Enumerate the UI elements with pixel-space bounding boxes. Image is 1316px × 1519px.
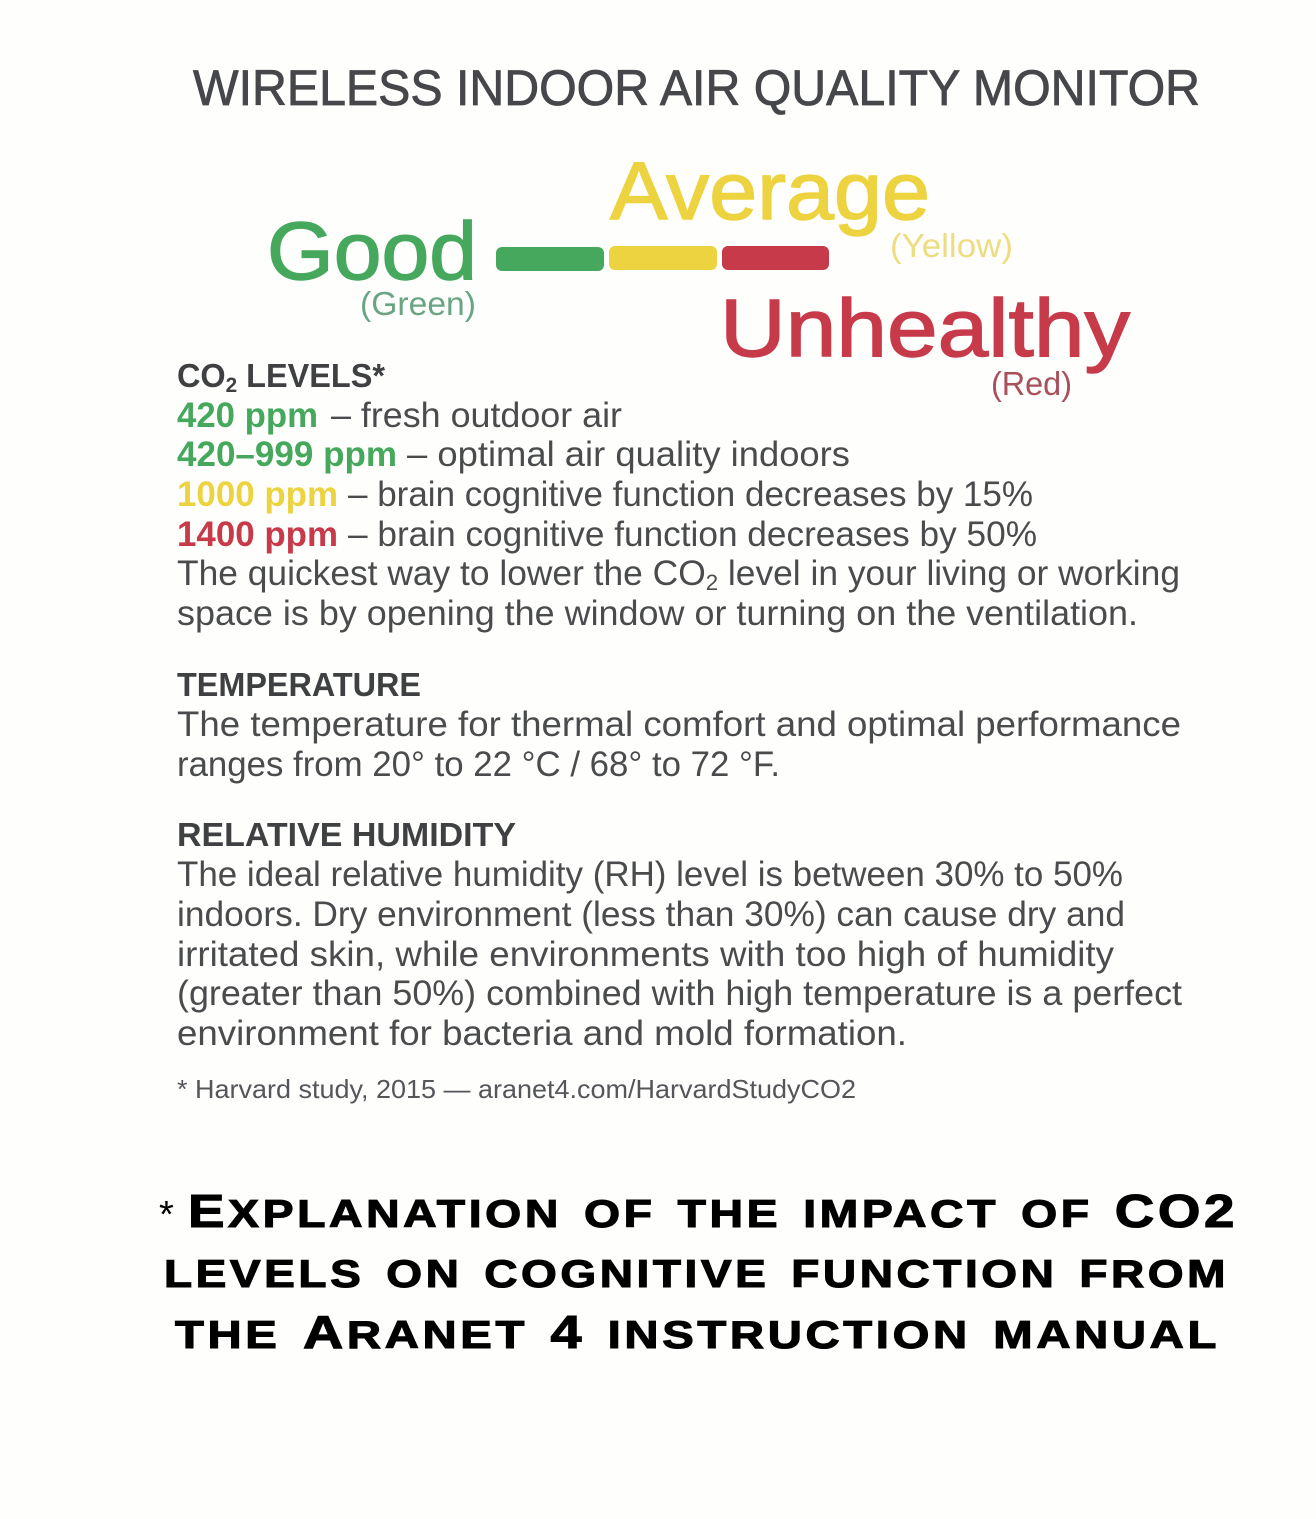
line: 420 ppm: – fresh outdoor air [331,396,622,435]
air quality scale [267,146,1130,402]
caption line 1: * [159,1194,174,1236]
line: 1400 ppm: – brain cognitive function decreases by 50% [348,515,1037,554]
line: 420-999 ppm [177,435,850,474]
heading: temperature: TEMPERATURE [177,666,421,703]
text: humidity line 2: indoors. Dry environment (less than 30%) can cause dry and [177,895,1125,934]
text: humidity line 5: environment for bacteria and mold formation. [177,1014,907,1053]
bar: red [722,246,829,270]
caption line 2: levels on cognitive function from [164,1236,1229,1299]
text: lowering CO2 line 2: space is by opening the window or turning on the ventilation. [177,594,1138,633]
text: lowering CO2 line 1: 2 [706,570,718,595]
heading: CO2 levels: LEVELS* [237,357,385,394]
text: humidity line 4: (greater than 50%) combined with high temperature is a perfect [177,974,1182,1013]
heading: CO2 levels: 2 [226,374,237,397]
caption line 1: Explanation of the impact of CO2 [188,1176,1238,1239]
section: relative humidity [177,816,1182,1053]
section: temperature [177,666,1181,784]
label: Red: (Red) [991,365,1072,402]
text: lowering CO2 line 1: level in your living or working [718,554,1180,593]
text: lowering CO2 line 1: The quickest way to lower the CO [177,554,700,593]
bar: green [496,247,604,271]
label: Unhealthy: Unhealthy [720,283,1130,374]
line: 1400 ppm: 1400 ppm [177,515,338,554]
line: 420 ppm: 420 ppm [177,396,318,435]
footnote: * Harvard study, 2015 — aranet4.com/HarvardStudyCO2 [177,1074,856,1104]
text: temperature line 2: ranges from 20° to 22 °C / 68° to 72 °F. [177,745,780,784]
line: 1000 ppm: – brain cognitive function decreases by 15% [348,475,1033,514]
line: 420 ppm [177,396,622,435]
bar: yellow [609,246,717,270]
label: Yellow: (Yellow) [890,227,1013,264]
text: temperature line 1: The temperature for thermal comfort and optimal performance [177,705,1181,744]
caption [159,1176,1238,1360]
title: WIRELESS INDOOR AIR QUALITY MONITOR [193,60,1200,116]
label: Average: Average [610,146,930,237]
line: 420-999 ppm: 420–999 ppm [177,435,397,474]
text: humidity line 1: The ideal relative humidity (RH) level is between 30% to 50% [177,855,1123,894]
line: 420-999 ppm: – optimal air quality indoors [407,435,850,474]
caption line 3: the Aranet 4 instruction manual [175,1297,1220,1360]
line: 1000 ppm: 1000 ppm [177,475,338,514]
heading: CO2 levels: CO [177,357,226,394]
section: CO2 levels [177,357,1180,633]
heading: relative humidity: RELATIVE HUMIDITY [177,816,516,853]
label: Good: Good [267,206,477,297]
text: humidity line 3: irritated skin, while environments with too high of humidity [177,935,1115,974]
label: Green: (Green) [360,285,476,322]
